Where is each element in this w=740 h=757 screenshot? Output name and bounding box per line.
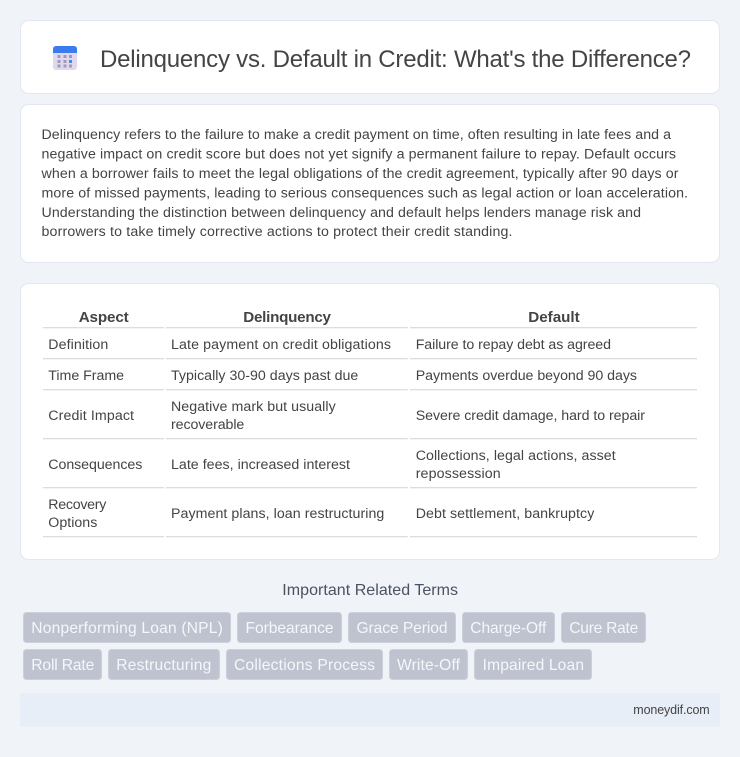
text block: summary: when a borrower fails to meet the legal obligations of the credit agreement, typically after 90 days or [40, 166, 679, 182]
icon: calendar [53, 46, 77, 70]
table row: recovery options [48, 497, 595, 531]
table row: consequences: Collections, legal actions, asset [416, 448, 616, 464]
table row: time frame: Payments overdue beyond 90 days [416, 368, 637, 384]
table row: credit impact: recoverable [171, 417, 244, 433]
table row: time frame [48, 368, 637, 384]
table row: definition: Definition [48, 337, 108, 353]
table row: credit impact: Severe credit damage, hard to repair [416, 408, 645, 424]
tags: related terms: Grace Period [356, 620, 448, 637]
table row: credit impact: Credit Impact [48, 408, 134, 424]
tags: related terms [24, 612, 646, 680]
table row: recovery options: Options [48, 515, 97, 531]
text block: summary: Understanding the distinction between delinquency and default helps lenders manage risk and [42, 205, 641, 221]
table row: time frame: Time Frame [48, 368, 124, 384]
heading: important related terms: Important Related Terms [282, 582, 458, 599]
table row: recovery options: Payment plans, loan restructuring [171, 506, 384, 522]
table row: consequences: repossession [416, 466, 501, 482]
table row: credit impact: Negative mark but usually [171, 399, 337, 415]
table row: credit impact [48, 399, 645, 433]
tags: related terms: Restructuring [116, 657, 211, 674]
text block: summary: Delinquency refers to the failure to make a credit payment on time, often resulting in late fees and a [42, 127, 671, 143]
table header: Aspect [79, 309, 129, 326]
table row: definition: Late payment on credit obligations [171, 337, 391, 353]
tags: related terms: Collections Process [234, 657, 375, 674]
footer [20, 693, 720, 727]
table row: recovery options: Debt settlement, bankruptcy [416, 506, 595, 522]
tags: related terms: Charge-Off [470, 620, 547, 637]
table row: definition [48, 337, 611, 353]
table row: recovery options: Recovery [48, 497, 107, 513]
text block: summary: negative impact on credit score but does not yet signify a permanent failure to repay. Default occurs [42, 146, 676, 162]
panel: title card [20, 20, 720, 94]
table header: Default [528, 309, 580, 326]
table header [79, 309, 580, 326]
tags: related terms: Cure Rate [569, 620, 638, 637]
table row: consequences: Consequences [48, 457, 142, 473]
table header: Delinquency [243, 309, 332, 326]
text block: summary: more of missed payments, leading to serious consequences such as legal action or loan acceleration. [42, 186, 688, 202]
tags: related terms: Roll Rate [31, 657, 94, 674]
tags: related terms: Nonperforming Loan (NPL) [31, 620, 223, 637]
panel: comparison table [20, 284, 720, 560]
table row: consequences: Late fees, increased interest [171, 457, 350, 473]
tags: related terms: Forbearance [246, 620, 334, 637]
title: Delinquency vs. Default in Credit: What's the Difference? [100, 46, 691, 73]
table row: consequences [48, 448, 616, 482]
text block: summary: borrowers to take timely corrective actions to protect their credit standing. [42, 224, 512, 240]
footer: moneydif.com [633, 703, 710, 717]
table row: definition: Failure to repay debt as agreed [416, 337, 611, 353]
table row: time frame: Typically 30-90 days past due [171, 368, 358, 384]
text block: summary [40, 127, 688, 240]
panel: summary paragraph [20, 104, 720, 262]
tags: related terms: Write-Off [397, 657, 461, 674]
tags: related terms: Impaired Loan [483, 657, 584, 674]
